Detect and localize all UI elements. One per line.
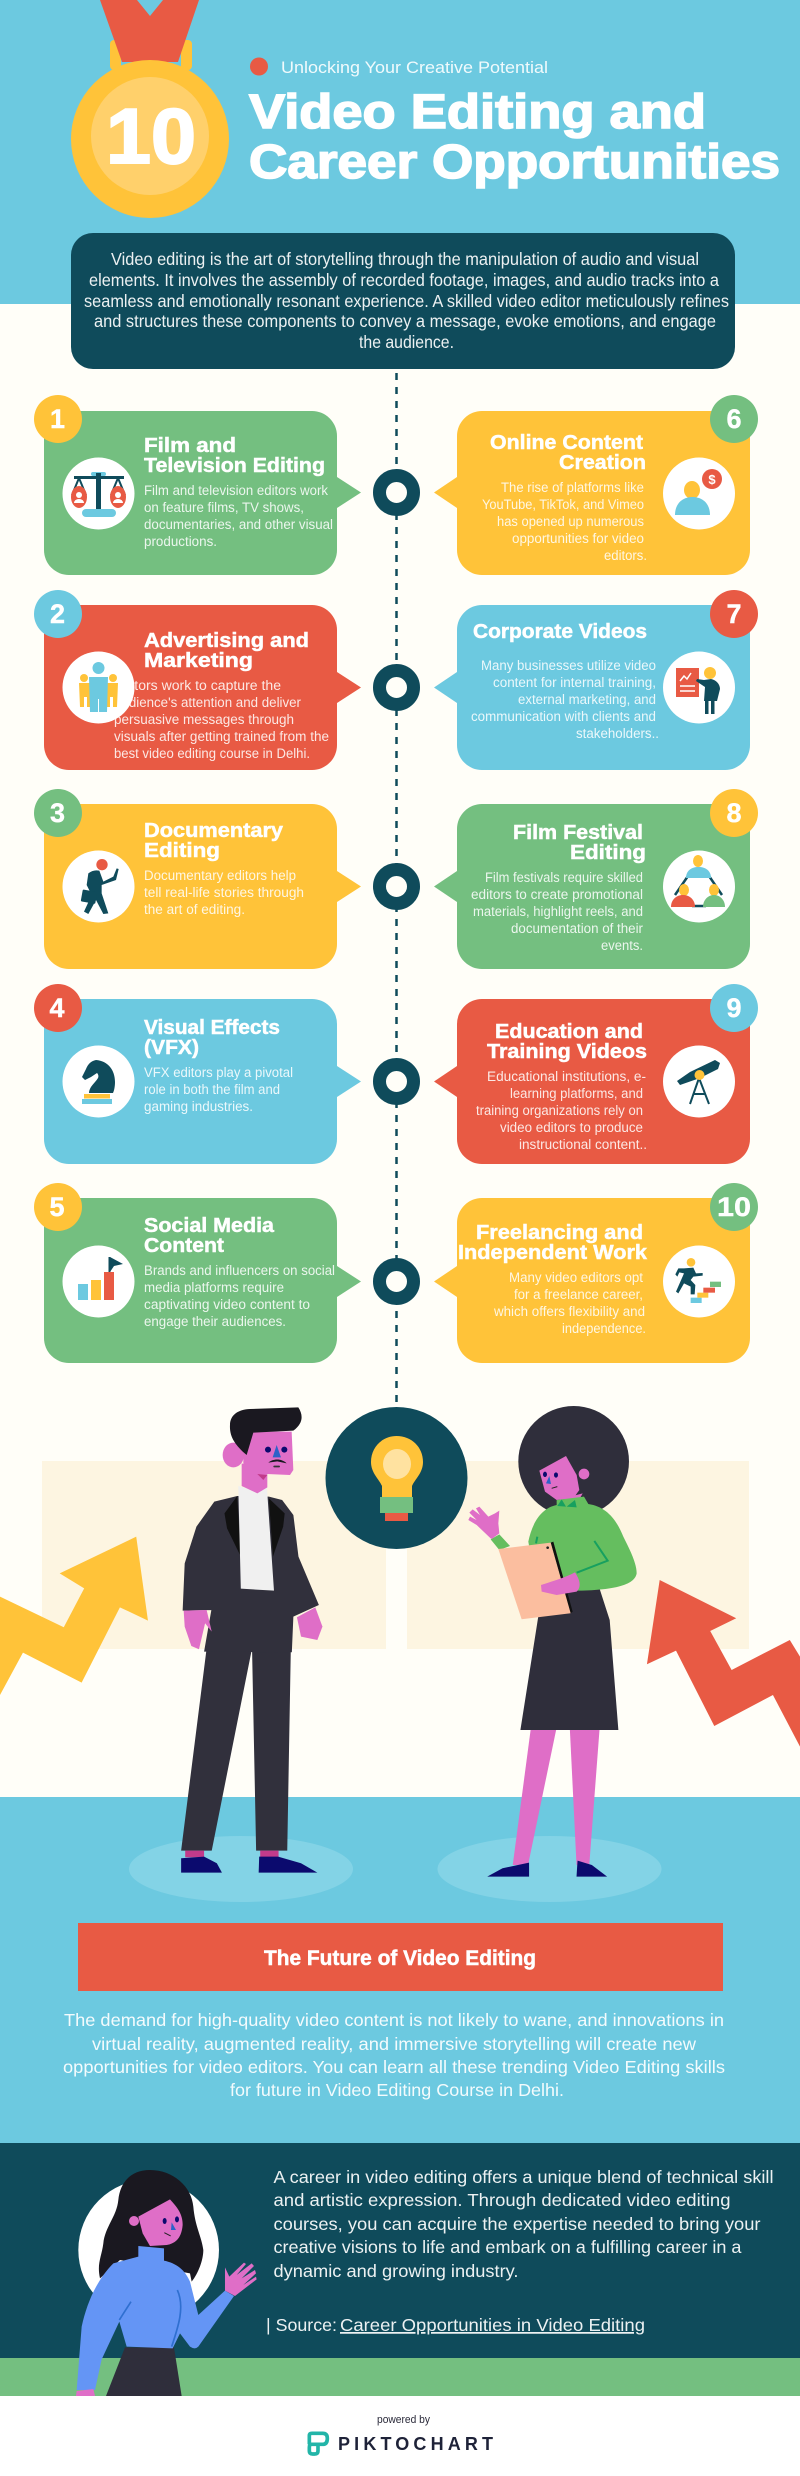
future paragraph: The demand for high-quality video content is not likely to wane, and innovations in (64, 2010, 724, 2030)
description: best video editing course in Delhi. (114, 746, 310, 761)
description: role in both the film and (144, 1082, 280, 1097)
icon: presenter (663, 652, 735, 724)
closing paragraph: and artistic expression. Through dedicated video editing (274, 2190, 730, 2210)
card 10: Freelancing and Independent Work (434, 1183, 758, 1363)
heading: Corporate Videos (473, 621, 647, 643)
heading (487, 1021, 647, 1063)
footer band (0, 2396, 800, 2476)
card 1: Film and Television Editing (34, 395, 361, 575)
description: documentaries, and other visual (144, 517, 333, 532)
description: events. (601, 938, 643, 953)
badge 1: 1 (50, 404, 65, 434)
badge 2 (34, 590, 82, 638)
description: on feature films, TV shows, (144, 500, 304, 515)
badge 8: 8 (726, 798, 742, 828)
heading: Television Editing (144, 455, 325, 477)
title: Career Opportunities (249, 136, 780, 189)
description: Editors work to capture the (114, 678, 281, 693)
closing paragraph (274, 2167, 774, 2281)
description: external marketing, and (518, 692, 656, 707)
heading: Documentary (144, 820, 284, 842)
description (476, 1069, 647, 1152)
card 3: Documentary Editing (34, 789, 361, 969)
heading: Marketing (144, 650, 253, 672)
closing paragraph: creative visions to life and embark on a fulfilling career in a (274, 2237, 742, 2257)
powered by label: powered by (377, 2414, 430, 2426)
heading (144, 1215, 275, 1257)
intro text box: and structures these components to convey a message, evoke emotions, and engage (94, 311, 716, 331)
description: audience's attention and deliver (114, 695, 301, 710)
arrow: yellow growth (0, 1537, 148, 1695)
description: Film and television editors work (144, 483, 328, 498)
icon: earning person: $ (708, 472, 716, 487)
floor band (0, 1797, 800, 2143)
description (493, 1270, 646, 1336)
future paragraph: virtual reality, augmented reality, and immersive storytelling will create new (92, 2034, 696, 2054)
badge 10 (710, 1183, 758, 1231)
badge 2: 2 (50, 599, 65, 629)
icon: people network (663, 850, 735, 922)
description: captivating video content to (144, 1297, 310, 1312)
icon: team (62, 652, 134, 724)
heading: Training Videos (487, 1041, 647, 1063)
icon: earning person (663, 458, 735, 530)
description: engage their audiences. (144, 1314, 286, 1329)
source line: Career Opportunities in Video Editing (340, 2315, 645, 2335)
badge 5: 5 (49, 1192, 65, 1222)
badge 4: 4 (49, 993, 65, 1023)
timeline rings (380, 476, 414, 1298)
heading: Education and (495, 1021, 643, 1043)
heading: Film Festival (513, 822, 643, 844)
card 5: Social Media Content (34, 1183, 361, 1363)
heading (513, 822, 646, 864)
heading (144, 630, 309, 672)
heading (458, 1222, 648, 1264)
description: Many businesses utilize video (481, 658, 656, 673)
heading: (VFX) (144, 1037, 199, 1059)
description: training organizations rely on (476, 1103, 643, 1118)
card 8: Film Festival Editing (434, 789, 758, 969)
description: stakeholders.. (576, 726, 659, 741)
intro text box: Video editing is the art of storytelling through the manipulation of audio and visual (111, 249, 699, 269)
figure: woman waving (76, 2170, 257, 2396)
badge 8 (710, 789, 758, 837)
description: editors to create promotional (471, 887, 643, 902)
intro text box: seamless and emotionally resonant experience. A skilled video editor meticulously refines (84, 291, 729, 311)
icon: justice scale (62, 458, 134, 530)
description: gaming industries. (144, 1099, 253, 1114)
description: which offers flexibility and (493, 1304, 645, 1319)
badge 6 (710, 395, 758, 443)
description: video editors to produce (500, 1120, 643, 1135)
header band (0, 0, 800, 304)
intro text box (71, 233, 735, 369)
figure: woman with clipboard (468, 1406, 637, 1877)
icon: walking reporter (62, 850, 134, 922)
heading (490, 432, 646, 474)
description: materials, highlight reels, and (473, 904, 643, 919)
badge 9 (710, 984, 758, 1032)
description (471, 658, 659, 741)
description (144, 1065, 293, 1114)
description: YouTube, TikTok, and Vimeo (482, 497, 644, 512)
heading (144, 435, 325, 477)
heading: Film and (144, 435, 236, 457)
badge 10: 10 (717, 1192, 751, 1222)
intro text box: the audience. (359, 332, 454, 352)
description (471, 870, 643, 953)
card 6: Online Content Creation (434, 395, 758, 575)
card 4: Visual Effects (VFX) (34, 984, 361, 1164)
heading: Content (144, 1235, 224, 1257)
heading: Editing (144, 840, 220, 862)
description (144, 868, 304, 917)
description: opportunities for video (512, 531, 644, 546)
heading: Advertising and (144, 630, 309, 652)
description: independence. (562, 1321, 646, 1336)
future paragraph (63, 2010, 725, 2100)
badge 9: 9 (726, 993, 742, 1023)
description: learning platforms, and (510, 1086, 643, 1101)
badge 4 (34, 984, 82, 1032)
title (249, 86, 780, 189)
badge 3: 3 (50, 798, 65, 828)
Piktochart logo: PIKTOCHART (338, 2434, 493, 2454)
title: Video Editing and (249, 86, 706, 139)
badge 7 (710, 590, 758, 638)
subtitle: Unlocking Your Creative Potential (281, 58, 548, 77)
description: for a freelance career, (514, 1287, 643, 1302)
icon: medal: 10 (106, 92, 196, 180)
description: Documentary editors help (144, 868, 296, 883)
icon: chess knight (62, 1046, 134, 1118)
icon: medal (71, 0, 229, 218)
arrow: red growth (647, 1580, 800, 1747)
closing band (0, 2143, 800, 2358)
description: Brands and influencers on social (144, 1263, 335, 1278)
description: documentation of their (511, 921, 643, 936)
description (144, 1263, 335, 1329)
card 9: Education and Training Videos (434, 984, 758, 1164)
section heading: The Future of Video Editing: The Future of Video Editing (264, 1947, 536, 1970)
description: Film festivals require skilled (485, 870, 643, 885)
icon: telescope (663, 1046, 735, 1118)
card 7: Corporate Videos (434, 590, 758, 770)
badge 7: 7 (726, 599, 742, 629)
icon: light bulb (326, 1407, 468, 1549)
description (482, 480, 647, 563)
heading: Visual Effects (144, 1017, 280, 1039)
heading: Editing (570, 842, 646, 864)
background panels behind figures (42, 1461, 749, 1649)
description: persuasive messages through (114, 712, 294, 727)
future paragraph: opportunities for video editors. You can learn all these trending Video Editing skills (63, 2057, 725, 2077)
description: instructional content.. (519, 1137, 647, 1152)
closing paragraph: dynamic and growing industry. (274, 2261, 518, 2281)
badge 5 (34, 1183, 82, 1231)
source line: | Source: (266, 2315, 337, 2335)
card 2: Advertising and Marketing (34, 590, 361, 770)
heading: Independent Work (458, 1242, 648, 1264)
description: the art of editing. (144, 902, 245, 917)
description (114, 678, 329, 761)
description: Many video editors opt (509, 1270, 643, 1285)
description: content for internal training, (493, 675, 656, 690)
description: communication with clients and (471, 709, 656, 724)
heading: Social Media (144, 1215, 275, 1237)
description: tell real-life stories through (144, 885, 304, 900)
description: has opened up numerous (497, 514, 644, 529)
intro text box: elements. It involves the assembly of recorded footage, images, and audio tracks into a (89, 270, 719, 290)
description: editors. (604, 548, 647, 563)
section heading: The Future of Video Editing (78, 1923, 723, 1991)
future paragraph: for future in Video Editing Course in Delhi. (230, 2080, 564, 2100)
green band (0, 2358, 800, 2396)
heading: Online Content (490, 432, 643, 454)
description: media platforms require (144, 1280, 284, 1295)
closing paragraph: A career in video editing offers a unique blend of technical skill (274, 2167, 774, 2187)
description (144, 483, 333, 549)
figure: man in suit (181, 1407, 322, 1873)
icon: bar chart with flag (62, 1246, 134, 1318)
description: VFX editors play a pivotal (144, 1065, 293, 1080)
description: productions. (144, 534, 217, 549)
description: visuals after getting trained from the (114, 729, 329, 744)
heading (144, 1017, 280, 1059)
badge 6: 6 (726, 404, 742, 434)
heading: Freelancing and (476, 1222, 643, 1244)
description: Educational institutions, e- (487, 1069, 646, 1084)
closing paragraph: courses, you can acquire the expertise needed to bring your (274, 2214, 761, 2234)
badge 3 (34, 789, 82, 837)
floor shadows (129, 1836, 662, 1902)
description: The rise of platforms like (501, 480, 644, 495)
icon: climbing steps (663, 1246, 735, 1318)
heading: Creation (559, 452, 646, 474)
heading (144, 820, 284, 862)
badge 1 (34, 395, 82, 443)
